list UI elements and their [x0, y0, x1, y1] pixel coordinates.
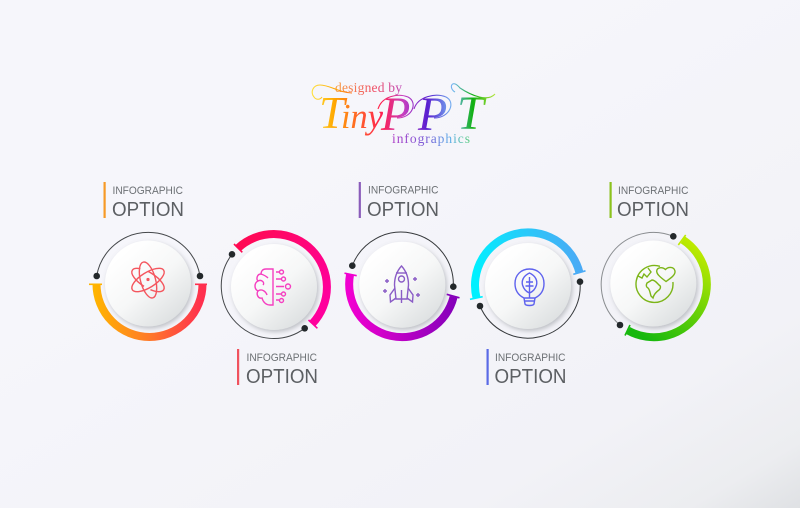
label 2: OPTION: [246, 366, 318, 388]
icon: globe with heart: [636, 265, 675, 302]
logo: designed by TinyPPT infographics: infographics: [392, 131, 470, 146]
logo: designed by TinyPPT infographics: T: [319, 87, 348, 138]
icon: brain with circuits: [255, 269, 290, 305]
ring 2: brain: [221, 234, 327, 338]
ring 3: rocket: [344, 232, 460, 337]
label 4: [486, 349, 566, 388]
logo: designed by TinyPPT infographics: T: [457, 87, 487, 140]
label 1: [104, 182, 184, 221]
logo: designed by TinyPPT infographics: [312, 80, 495, 146]
label 5: INFOGRAPHIC: [618, 185, 689, 197]
label 4: INFOGRAPHIC: [495, 352, 566, 364]
icon: rocket: [383, 266, 420, 303]
logo: designed by TinyPPT infographics: P: [417, 88, 447, 141]
label 3: [359, 182, 439, 221]
icon: atom: [128, 260, 168, 300]
label 1: INFOGRAPHIC: [112, 185, 183, 197]
logo: designed by TinyPPT infographics: P: [380, 88, 410, 141]
icon: bulb with leaf: [515, 269, 544, 306]
ring 4: light bulb: [470, 232, 586, 338]
label 4: OPTION: [494, 366, 566, 388]
logo: designed by TinyPPT infographics: iny: [341, 97, 383, 136]
label 2: [237, 349, 318, 388]
label 3: INFOGRAPHIC: [368, 184, 439, 196]
ring 5: globe: [601, 232, 707, 337]
label 5: [610, 182, 689, 221]
logo: designed by TinyPPT infographics: designed by: [335, 80, 402, 95]
label 3: OPTION: [367, 199, 439, 221]
label 1: OPTION: [112, 199, 184, 221]
ring 1: atom: [89, 232, 207, 337]
label 2: INFOGRAPHIC: [246, 352, 317, 364]
label 5: OPTION: [617, 199, 689, 221]
